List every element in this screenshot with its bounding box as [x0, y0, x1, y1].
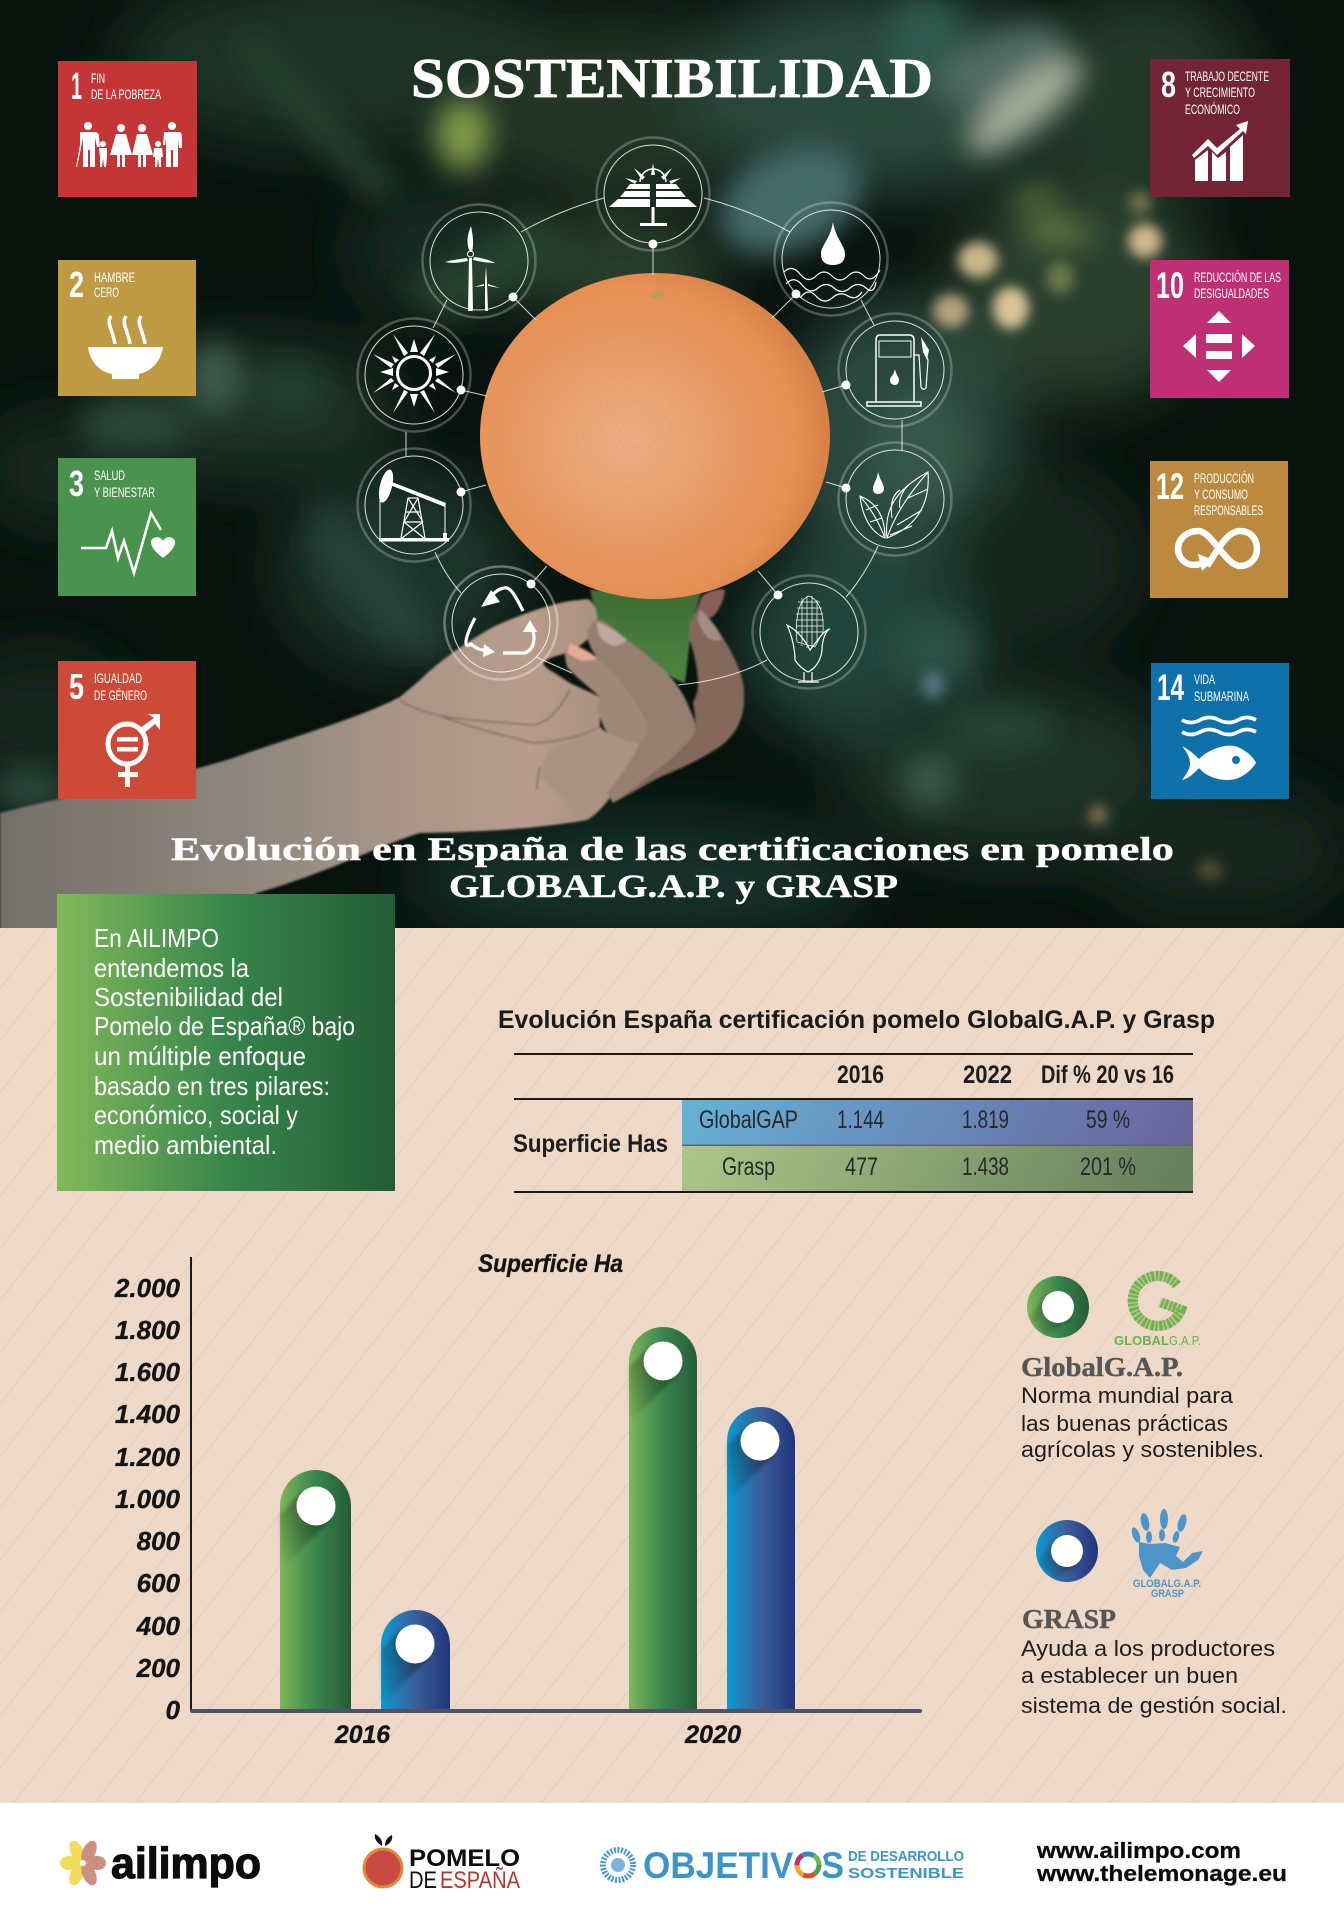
y axis labels: 400: [136, 1611, 181, 1641]
tile: SDG 8: [1150, 59, 1290, 197]
tile: SDG 12: [1150, 461, 1288, 598]
logo: GlobalG.A.P.: GLOBAL: [1114, 1333, 1169, 1348]
tile: SDG 5: IGUALDAD: [94, 670, 142, 686]
icon: corn cob: [752, 576, 866, 688]
tile: SDG 5: 5: [69, 666, 84, 707]
legend heading: GRASP: [1022, 1604, 1116, 1634]
table header row: [513, 1061, 1174, 1158]
table title: Evolución España certificación pomelo GlobalG.A.P. y Grasp: [498, 1006, 1215, 1034]
panel: green intro box: medio ambiental.: [94, 1130, 277, 1160]
y axis labels: 1.600: [115, 1357, 181, 1387]
websites: [1036, 1838, 1287, 1886]
y axis labels: 1.000: [115, 1484, 181, 1514]
logo: Pomelo de España: DE: [409, 1867, 437, 1894]
y axis labels: 800: [137, 1526, 181, 1556]
panel: footer: [0, 1803, 1344, 1916]
tile: SDG 1: [58, 61, 197, 197]
icon: blue marker: [1036, 1520, 1098, 1582]
bar: GlobalGAP 2022: [629, 1327, 697, 1709]
x axis labels: 2016: [334, 1721, 391, 1749]
legend description: Ayuda a los productores: [1021, 1636, 1275, 1661]
middle finger: [587, 620, 695, 803]
table header row: 2022: [963, 1061, 1012, 1089]
icon: bowl: [88, 316, 163, 379]
heading: certifications: GLOBALG.A.P. y GRASP: [449, 869, 898, 905]
tile: SDG 14: VIDA: [1194, 671, 1215, 687]
table data rows: 59 %: [1086, 1106, 1130, 1134]
table header row: Superficie Has: [513, 1130, 668, 1158]
small finger behind fruit: [696, 589, 725, 618]
bar: Grasp 2016: [381, 1610, 450, 1709]
fold lines of the palm: [400, 690, 600, 790]
tile: SDG 5: DE GÉNERO: [94, 687, 147, 703]
table data rows: [699, 1106, 1136, 1181]
tile: SDG 12: Y CONSUMO: [1194, 486, 1248, 502]
panel: green intro box: En AILIMPO: [94, 923, 219, 953]
stem base of the fruit: [590, 590, 702, 683]
legend description: a establecer un buen: [1021, 1663, 1238, 1688]
websites: www.thelemonage.eu: [1036, 1861, 1287, 1886]
icon: heartbeat: [81, 513, 175, 573]
logo: Pomelo de España: ESPAÑA: [440, 1867, 520, 1894]
logo: GlobalG.A.P.: [1114, 1276, 1201, 1348]
tile: SDG 10: [1150, 260, 1289, 398]
table data rows: 477: [845, 1153, 878, 1181]
legend description: Norma mundial para: [1021, 1383, 1234, 1408]
icon: solar panel: [596, 138, 710, 250]
icon: wind turbines: [422, 204, 536, 318]
finger pad below the index: [540, 727, 640, 820]
table data rows: Grasp: [722, 1153, 775, 1181]
tile: SDG 12: PRODUCCIÓN: [1194, 470, 1254, 486]
table header row: 2016: [837, 1061, 884, 1089]
heading: certifications: Evolución en España de las certificaciones en pomelo: [171, 832, 1174, 868]
logo: Objetivos de Desarrollo Sostenible: [603, 1845, 964, 1886]
legend description: [1021, 1636, 1287, 1718]
tile: SDG 1: FIN: [91, 70, 105, 86]
panel: green intro box: [57, 894, 395, 1191]
tile: SDG 2: [58, 260, 196, 396]
bar: GlobalGAP 2016: [280, 1470, 351, 1709]
icon: family: [76, 122, 182, 167]
y axis labels: 600: [137, 1568, 181, 1598]
y axis labels: 1.400: [115, 1399, 181, 1429]
panel: green intro box: basado en tres pilares:: [94, 1071, 330, 1101]
icon: inequality arrows: [1183, 311, 1255, 382]
icon: oil pump: [358, 448, 470, 562]
tile: SDG 2: CERO: [94, 284, 119, 300]
logo: GRASP hand: GLOBALG.A.P.: [1133, 1578, 1201, 1590]
tile: SDG 14: SUBMARINA: [1194, 688, 1249, 704]
icon: leaves and drop: [838, 442, 952, 556]
table data rows: 201 %: [1080, 1153, 1136, 1181]
y axis labels: 200: [136, 1653, 181, 1683]
y axis labels: [114, 1273, 181, 1725]
tile: SDG 3: 3: [69, 463, 84, 504]
panel: green intro box: Sostenibilidad del: [94, 982, 283, 1012]
legend: GRASP: [1021, 1509, 1287, 1718]
y axis labels: 1.200: [115, 1442, 181, 1472]
icon: infinity loop: [1178, 531, 1257, 571]
table data rows: 1.819: [962, 1106, 1009, 1134]
legend description: las buenas prácticas: [1021, 1411, 1228, 1436]
index finger: [565, 643, 648, 743]
icon: sun: [358, 318, 470, 432]
table data rows: GlobalGAP: [699, 1106, 798, 1134]
table header row: Dif % 20 vs 16: [1041, 1061, 1174, 1089]
icon: growth chart: [1192, 121, 1248, 181]
tile: SDG 14: [1151, 663, 1289, 799]
panel: beige background: [0, 928, 1344, 1803]
heading: certifications: [171, 832, 1174, 905]
panel: green intro box: entendemos la: [94, 953, 249, 983]
tile: SDG 3: SALUD: [94, 467, 125, 483]
chart title: Superficie Ha: [478, 1250, 623, 1278]
icon: gender equality: [108, 714, 160, 787]
logo: Objetivos de Desarrollo Sostenible: OBJETIVOS: [643, 1845, 844, 1886]
y axis labels: 1.800: [115, 1315, 181, 1345]
legend description: sistema de gestión social.: [1021, 1693, 1287, 1718]
logo: GlobalG.A.P.: G.A.P.: [1169, 1333, 1201, 1348]
legend description: agrícolas y sostenibles.: [1021, 1437, 1264, 1462]
table data rows: 1.144: [837, 1106, 884, 1134]
tile: SDG 5: [58, 661, 196, 799]
panel: background photo of foliage: [0, 0, 1344, 940]
icon: recycle arrows: [444, 566, 558, 680]
legend: GlobalG.A.P.: [1021, 1276, 1264, 1462]
panel: green intro box: un múltiple enfoque: [94, 1041, 306, 1071]
table: certification evolution: [498, 1006, 1215, 1193]
tile: SDG 8: 8: [1161, 64, 1176, 105]
tile: SDG 8: ECONÓMICO: [1185, 101, 1240, 117]
network of sustainability icons: [358, 138, 952, 688]
palm and arm: [0, 599, 613, 930]
icon: water drop and waves: [774, 202, 888, 316]
icon: fuel pump: [838, 314, 952, 426]
y axis labels: 0: [166, 1695, 181, 1725]
fruit navel: [650, 291, 664, 299]
icon: green marker: [1027, 1276, 1089, 1338]
title: SOSTENIBILIDAD: [411, 48, 933, 110]
bar chart: Superficie Ha: 2020: [684, 1721, 741, 1749]
tile: SDG 3: [58, 458, 196, 596]
grapefruit: [480, 273, 830, 599]
tile: SDG 8: TRABAJO DECENTE: [1185, 68, 1269, 84]
tile: SDG 3: Y BIENESTAR: [94, 484, 155, 500]
logo: ailimpo: ailimpo: [111, 1839, 261, 1888]
y axis labels: 2.000: [114, 1273, 181, 1303]
tile: SDG 10: REDUCCIÓN DE LAS: [1194, 269, 1281, 285]
websites: www.ailimpo.com: [1036, 1838, 1241, 1863]
legend heading: GlobalG.A.P.: [1021, 1352, 1183, 1382]
tile: SDG 8: Y CRECIMIENTO: [1185, 84, 1255, 100]
tile: SDG 12: 12: [1156, 466, 1184, 507]
tile: SDG 2: HAMBRE: [94, 269, 135, 285]
tile: SDG 12: RESPONSABLES: [1194, 502, 1263, 518]
logo: Pomelo de España: POMELO: [409, 1845, 520, 1872]
tile: SDG 14: 14: [1157, 667, 1184, 708]
tile: SDG 1: DE LA POBREZA: [91, 86, 161, 102]
icon: fish and waves: [1182, 718, 1256, 780]
logo: Pomelo de España: [364, 1834, 520, 1894]
logo: Objetivos de Desarrollo Sostenible: SOSTENIBLE: [848, 1865, 964, 1882]
legend description: [1021, 1383, 1264, 1462]
connector lines: [406, 198, 902, 685]
logo: Objetivos de Desarrollo Sostenible: DE DESARROLLO: [848, 1848, 964, 1865]
panel: green intro box: económico, social y: [94, 1100, 298, 1130]
tile: SDG 10: DESIGUALDADES: [1194, 285, 1269, 301]
panel: green intro box: Pomelo de España® bajo: [94, 1011, 355, 1041]
tile: SDG 10: 10: [1156, 265, 1184, 306]
table data rows: 1.438: [962, 1153, 1009, 1181]
bar chart: Superficie Ha: [114, 1250, 922, 1749]
logo: GRASP hand: [1130, 1509, 1203, 1600]
logo: GRASP hand: GRASP: [1151, 1588, 1184, 1600]
bar: Grasp 2022: [727, 1407, 795, 1709]
tile: SDG 1: 1: [71, 66, 82, 108]
ring finger: [613, 610, 744, 803]
tile: SDG 2: 2: [69, 264, 84, 305]
hand holding the grapefruit: [0, 589, 744, 930]
